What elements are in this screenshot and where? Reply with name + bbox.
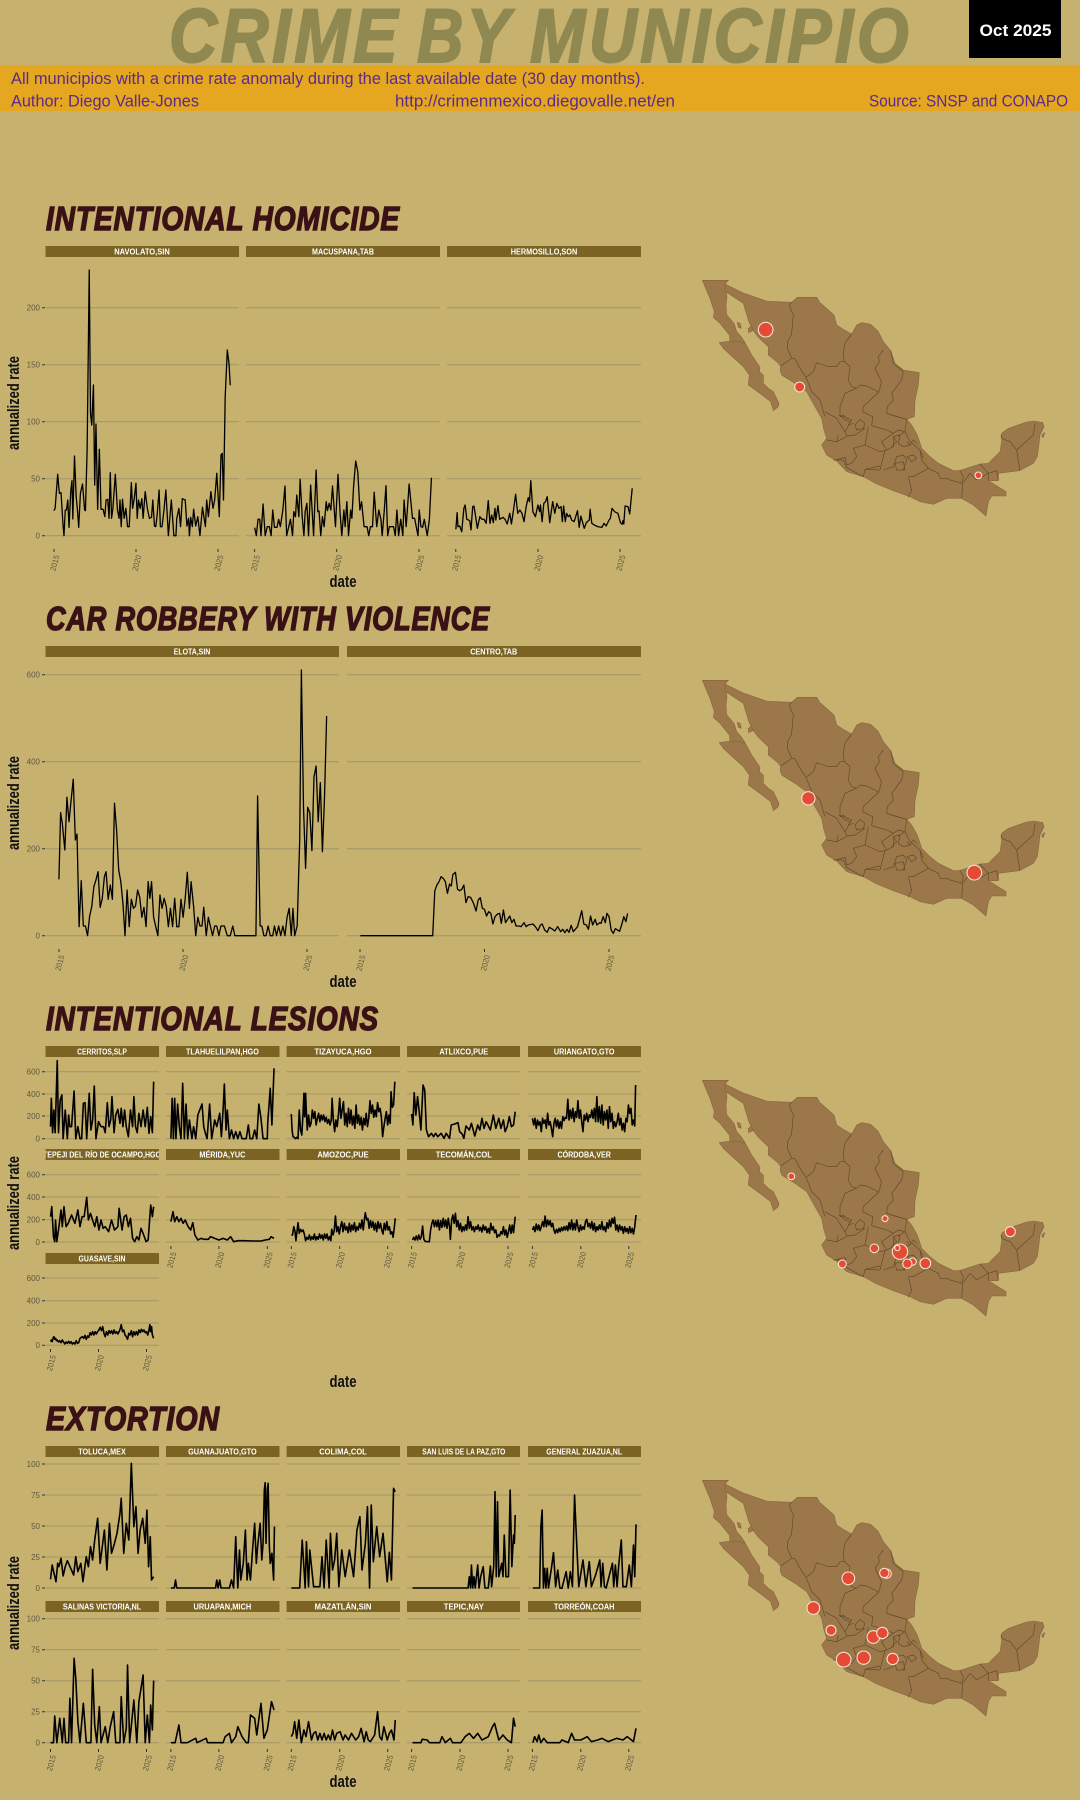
panel: Tepic: 2025: [503, 1754, 516, 1772]
map: intentional homicide: [702, 280, 1045, 516]
panel: Salinas Victoria: 2025: [141, 1754, 154, 1772]
panel: Torreón: 2020: [575, 1754, 588, 1772]
y axis labels: [27, 304, 41, 540]
panel: Guasave: 2025: [141, 1354, 154, 1372]
panel: Amozoc: 2020: [334, 1251, 347, 1269]
panel: Tepic: 2020: [455, 1754, 468, 1772]
panel: Tepeji del Río de Ocampo: [43, 1149, 161, 1242]
panel: Salinas Victoria: 2015: [45, 1754, 58, 1772]
y axis labels: 400: [27, 1090, 41, 1099]
y axis labels: 200: [27, 1112, 41, 1121]
panel: Macuspana: MACUSPANA,TAB: [312, 248, 374, 256]
panel: San Luis de la Paz: SAN LUIS DE LA PAZ,GTO: [422, 1448, 505, 1456]
map: intentional lesions: [702, 1080, 1045, 1316]
panel: Uruapan: 2020: [213, 1754, 226, 1772]
panel: Córdoba: CÓRDOBA,VER: [557, 1150, 611, 1160]
y axis labels: 400: [27, 1193, 41, 1202]
panel: Toluca: [46, 1446, 159, 1582]
heading: car robbery with violence: CAR ROBBERY WITH VIOLENCE: [46, 600, 490, 637]
y axis labels: 600: [27, 1170, 41, 1180]
panel: Torreón: 2015: [527, 1754, 540, 1772]
map: extortion: [702, 1480, 1045, 1716]
panel: Tecomán: 2020: [455, 1251, 468, 1269]
panel: Tecomán: 2025: [503, 1251, 516, 1269]
y axis labels: 75: [31, 1646, 41, 1654]
heading: intentional homicide: INTENTIONAL HOMICIDE: [46, 200, 400, 237]
panel: Uruapan: [165, 1601, 280, 1772]
y axis labels: 0: [36, 1134, 41, 1144]
panel: Guasave: GUASAVE,SIN: [78, 1254, 126, 1264]
y axis labels: 400: [27, 758, 41, 766]
panel: Tlahuelilpan: TLAHUELILPAN,HGO: [186, 1048, 259, 1056]
panel: San Luis de la Paz: [407, 1446, 520, 1588]
x axis title: date: [330, 1772, 356, 1791]
panel: Macuspana: 2020: [331, 554, 344, 572]
y axis labels: 25: [31, 1708, 41, 1716]
subtitle band: All municipios with a crime rate anomaly during the last available date (30 day months).: [11, 70, 645, 88]
y axis labels: 100: [27, 1614, 41, 1624]
panel: Salinas Victoria: SALINAS VICTORIA,NL: [63, 1602, 141, 1612]
panel: Hermosillo: [447, 246, 641, 572]
panel: Uriangato: URIANGATO,GTO: [554, 1048, 614, 1056]
y axis labels: 200: [27, 304, 41, 312]
subtitle band: [0, 65, 1080, 111]
panel: General Zuazua: [528, 1446, 641, 1588]
x axis title: date: [330, 1372, 356, 1391]
panel: Tepic: TEPIC,NAY: [444, 1602, 484, 1612]
panel: Córdoba: 2015: [527, 1251, 540, 1269]
section: car robbery with violence: [4, 600, 641, 991]
panel: Mazatlán: [286, 1601, 400, 1772]
panel: Guasave: [45, 1253, 159, 1372]
panel: Cerritos: [46, 1046, 159, 1139]
panel: Salinas Victoria: [45, 1601, 159, 1772]
panel: Cerritos: CERRITOS,SLP: [77, 1048, 127, 1056]
y axis labels: 75: [31, 1491, 41, 1500]
panel: Macuspana: 2015: [249, 554, 262, 572]
panel: Tecomán: [406, 1149, 520, 1269]
date badge: [969, 0, 1061, 58]
y axis labels: 600: [27, 670, 41, 680]
y axis title: annualized rate: [4, 1556, 23, 1650]
panel: Torreón: [527, 1601, 641, 1772]
panel: Mérida: 2015: [165, 1251, 178, 1269]
y axis labels: 0: [36, 1584, 41, 1593]
panel: Centro: [347, 646, 641, 972]
panel: Amozoc: 2015: [286, 1251, 299, 1269]
y axis labels: 200: [27, 844, 41, 854]
panel: Guasave: 2020: [93, 1354, 106, 1372]
y axis labels: 0: [36, 932, 41, 940]
panel: Navolato: [46, 246, 239, 572]
panel: Córdoba: [527, 1149, 641, 1269]
panel: Elota: 2020: [178, 954, 191, 972]
panel: Hermosillo: 2025: [615, 554, 628, 572]
panel: Torreón: 2025: [623, 1754, 636, 1772]
panel: Hermosillo: HERMOSILLO,SON: [511, 248, 577, 256]
panel: Mazatlán: 2015: [286, 1754, 299, 1772]
y axis title: annualized rate: [4, 1156, 23, 1250]
panel: Guanajuato: [166, 1446, 280, 1588]
panel: Centro: CENTRO,TAB: [470, 648, 517, 656]
panel: Amozoc: AMOZOC,PUE: [317, 1150, 369, 1160]
panel: Colima: [287, 1446, 400, 1588]
x axis title: date: [330, 972, 356, 991]
y axis labels: [27, 1460, 41, 1748]
x axis title: date: [330, 572, 356, 591]
panel: Tecomán: 2015: [406, 1251, 419, 1269]
panel: Elota: [46, 646, 339, 972]
panel: Mazatlán: 2025: [382, 1754, 395, 1772]
title: [169, 0, 912, 79]
panel: Centro: 2015: [355, 954, 368, 972]
y axis labels: 50: [31, 1522, 41, 1531]
panel: Atlixco: ATLIXCO,PUE: [439, 1048, 489, 1056]
panel: Mérida: 2020: [213, 1251, 226, 1269]
heading: intentional lesions: INTENTIONAL LESIONS: [46, 1000, 379, 1037]
panel: Hermosillo: 2020: [533, 554, 546, 572]
y axis title: annualized rate: [4, 356, 23, 450]
panel: Toluca: TOLUCA,MEX: [78, 1448, 126, 1456]
panel: Elota: ELOTA,SIN: [174, 648, 210, 656]
panel: Córdoba: 2020: [575, 1251, 588, 1269]
panel: Hermosillo: 2015: [450, 554, 463, 572]
y axis labels: [27, 670, 41, 940]
panel: Mérida: 2025: [262, 1251, 275, 1269]
panel: Navolato: NAVOLATO,SIN: [114, 248, 170, 256]
panel: Mazatlán: MAZATLÁN,SIN: [315, 1602, 372, 1612]
heading: extortion: EXTORTION: [46, 1400, 220, 1437]
y axis labels: 50: [31, 474, 41, 484]
panel: Tepeji del Río de Ocampo: TEPEJI DEL RÍO DE OCAMPO,HGO: [43, 1150, 161, 1160]
panel: Mérida: MÉRIDA,YUC: [199, 1150, 246, 1160]
panel: Tepic: 2015: [406, 1754, 419, 1772]
panel: Amozoc: [286, 1149, 400, 1269]
panel: Uruapan: 2015: [165, 1754, 178, 1772]
panel: Uriangato: [528, 1046, 641, 1137]
panel: Guasave: 2015: [45, 1354, 58, 1372]
panel: Centro: 2020: [479, 954, 492, 972]
panel: Navolato: 2025: [213, 554, 226, 572]
y axis labels: 200: [27, 1319, 41, 1328]
y axis labels: 600: [27, 1068, 41, 1076]
y axis labels: 100: [27, 418, 41, 426]
panel: Elota: 2015: [54, 954, 67, 972]
panel: Elota: 2025: [302, 954, 315, 972]
panel: Centro: 2025: [604, 954, 617, 972]
date badge: Oct 2025: [980, 21, 1052, 40]
panel: Navolato: 2020: [131, 554, 144, 572]
panel: Salinas Victoria: 2020: [93, 1754, 106, 1772]
panel: Córdoba: 2025: [623, 1251, 636, 1269]
panel: Mazatlán: 2020: [334, 1754, 347, 1772]
y axis labels: 150: [27, 360, 41, 370]
panel: Tizayuca: [287, 1046, 400, 1139]
y axis labels: 0: [36, 1238, 41, 1247]
y axis labels: 25: [31, 1553, 41, 1562]
panel: Atlixco: [407, 1046, 520, 1138]
panel: Macuspana: [246, 246, 440, 572]
panel: Tepic: [406, 1601, 520, 1772]
y axis labels: [27, 1068, 41, 1350]
panel: Macuspana: 2025: [414, 554, 427, 572]
panel: Uruapan: 2025: [262, 1754, 275, 1772]
subtitle band: http://crimenmexico.diegovalle.net/en: [395, 92, 675, 110]
panel: Guanajuato: GUANAJUATO,GTO: [188, 1448, 257, 1456]
subtitle band: Source: SNSP and CONAPO: [869, 92, 1068, 110]
section: intentional homicide: [4, 200, 641, 591]
section: extortion: [4, 1400, 641, 1791]
panel: Torreón: TORREÓN,COAH: [554, 1602, 615, 1612]
panel: Mérida: [165, 1149, 280, 1269]
y axis labels: 100: [27, 1460, 41, 1469]
panel: Tizayuca: TIZAYUCA,HGO: [314, 1048, 372, 1056]
panel: General Zuazua: GENERAL ZUAZUA,NL: [546, 1448, 622, 1456]
map: car robbery: [702, 680, 1045, 916]
y axis labels: 200: [27, 1216, 41, 1224]
y axis labels: 400: [27, 1296, 41, 1306]
y axis labels: 0: [36, 1738, 41, 1748]
y axis labels: 600: [27, 1274, 41, 1283]
y axis labels: 50: [31, 1676, 41, 1686]
panel: Amozoc: 2025: [382, 1251, 395, 1269]
panel: Tlahuelilpan: [166, 1046, 280, 1139]
panel: Colima: COLIMA,COL: [319, 1448, 367, 1456]
y axis labels: 0: [36, 1341, 41, 1350]
subtitle band: Author: Diego Valle-Jones: [11, 92, 199, 110]
panel: Navolato: 2015: [49, 554, 62, 572]
y axis labels: 0: [36, 532, 41, 540]
section: intentional lesions: [4, 1000, 641, 1391]
panel: Uruapan: URUAPAN,MICH: [194, 1602, 251, 1612]
panel: Tecomán: TECOMÁN,COL: [436, 1150, 492, 1160]
y axis title: annualized rate: [4, 756, 23, 850]
